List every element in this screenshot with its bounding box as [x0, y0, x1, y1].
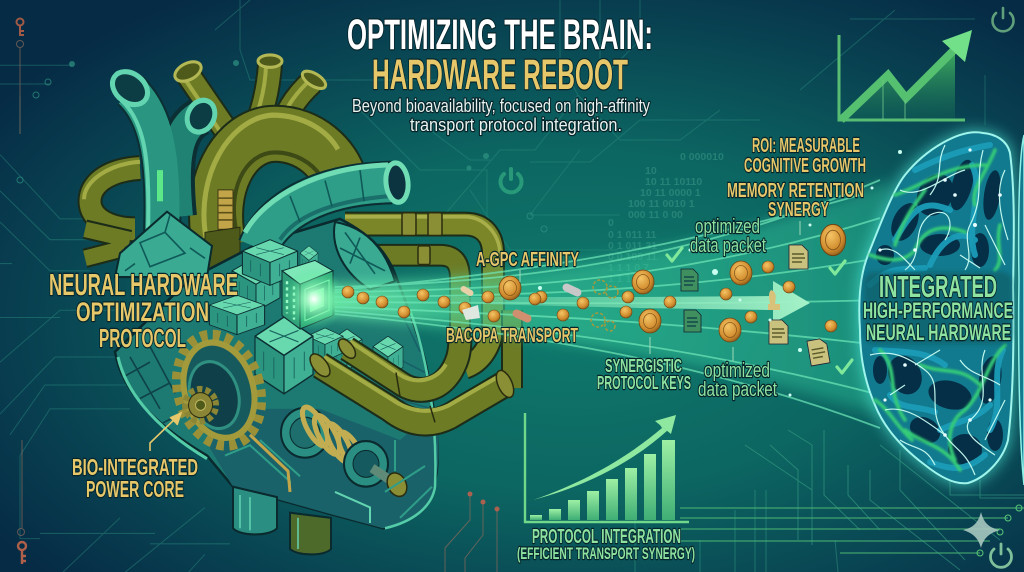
vessel opening [384, 162, 410, 203]
binary digits: 0 1 011 11 [608, 229, 657, 241]
green folds [870, 150, 1005, 470]
stream glow [325, 180, 890, 415]
label: optimized packet lower [698, 360, 777, 401]
label: roi: ROI: MEASURABLE [752, 135, 860, 157]
label: optimized packet lower: data packet [698, 379, 777, 401]
coins and particles [342, 224, 846, 342]
binary digits: 10 11 10110 [645, 176, 702, 188]
olive vessels top [172, 55, 328, 140]
label: integrated neural hardware [863, 269, 1013, 345]
label: neural hardware: PROTOCOL [99, 323, 186, 353]
label: bacopa transport: BACOPA TRANSPORT [446, 325, 578, 347]
dark fold pockets [873, 157, 1005, 466]
binary digits: 000 11 0 00 [628, 209, 683, 221]
circuit traces centre and top [215, 0, 985, 250]
icon: processor chip [282, 260, 333, 329]
subtitle: Beyond bioavailability, focused on high-affinity [352, 96, 650, 116]
icon: sparkle [963, 512, 1000, 548]
label: neural hardware [49, 267, 238, 353]
label: power core [72, 454, 198, 502]
circuit nodes [17, 60, 547, 232]
label: neural hardware: NEURAL HARDWARE [49, 267, 238, 302]
icon: key bottom left [18, 542, 26, 564]
icon: red nodes [468, 492, 500, 512]
binary digits: 100 11 0010 1 [628, 198, 695, 210]
lower body machinery [205, 409, 439, 528]
label: memory retention: SYNERGY [768, 199, 829, 221]
teal lobe left [115, 212, 212, 277]
brain glow [859, 132, 1014, 483]
central arrow [440, 281, 810, 323]
label: a-gpc affinity: A-GPC AFFINITY [476, 249, 579, 271]
leader lines [520, 221, 800, 361]
label: power core: BIO-INTEGRATED [72, 454, 198, 480]
back right olive pipes [345, 217, 512, 388]
front olive pipes [306, 336, 517, 423]
label: optimized packet upper [690, 216, 766, 257]
bars [530, 440, 675, 520]
brain text backing [864, 272, 1012, 344]
binary digits: 0 1 011 31 [608, 240, 657, 252]
chart caption [517, 526, 695, 563]
pipe collars [402, 213, 442, 265]
chart caption: (EFFICIENT TRANSPORT SYNERGY) [517, 544, 695, 563]
binary digits: 0 000010 [680, 151, 724, 163]
check marks [667, 248, 852, 373]
icon: power bottom right [990, 544, 1012, 567]
data stream flow [282, 150, 902, 428]
binary digits: 10 [645, 165, 657, 177]
title: HARDWARE REBOOT [372, 51, 628, 99]
olive aortic arch [204, 115, 340, 269]
label: optimized packet upper: data packet [690, 235, 766, 257]
icon: gear [166, 325, 272, 455]
label: neural hardware: OPTIMIZATION [76, 297, 209, 327]
circuit traces left [0, 65, 230, 572]
brain node dots [878, 148, 1002, 437]
pills and molecules [459, 280, 780, 331]
icon: spring piston [281, 403, 411, 500]
chart caption: PROTOCOL INTEGRATION [532, 526, 681, 548]
label: synergistic keys: PROTOCOL KEYS [597, 373, 691, 393]
documents [681, 245, 830, 366]
bright vein network [870, 145, 1008, 475]
blue folds [870, 145, 1003, 468]
second hemisphere sliver [1019, 135, 1024, 485]
label: roi [744, 135, 866, 177]
block stack [209, 240, 403, 394]
title [347, 11, 653, 99]
lower machinery details [225, 435, 432, 523]
binary digits: 10 11 0000 1 [640, 187, 701, 199]
top right growth chart [839, 30, 972, 120]
icon: key top left [16, 18, 24, 36]
teal lobe right [334, 222, 395, 290]
label: memory retention [727, 180, 864, 221]
arrow: power core pointer [150, 413, 181, 451]
sparkle dots [538, 150, 902, 396]
binary digits: 1 1 1 0 7 [608, 262, 649, 274]
left shell segments [118, 310, 435, 528]
brain illustration [859, 132, 1024, 485]
bottom bar chart [525, 413, 689, 522]
bottom vessels [233, 487, 331, 554]
icon: power faint middle [500, 169, 522, 192]
heart illustration [84, 55, 517, 554]
label: synergistic keys: SYNERGISTIC [605, 356, 682, 376]
brain hemisphere [859, 132, 1014, 483]
subtitle [352, 96, 650, 135]
axes [525, 413, 689, 522]
label: optimized packet lower: optimized [704, 360, 770, 382]
binary digits: 1 1 1 0 [608, 273, 640, 285]
vertical key traces [16, 40, 497, 572]
binary digits: 0 0 100 11 [608, 251, 657, 263]
panel: bottom right circuit lines [635, 430, 1024, 572]
label: power core: POWER CORE [86, 476, 184, 502]
icon: power top right [992, 8, 1014, 31]
subtitle: transport protocol integration. [410, 115, 622, 135]
label: synergistic keys [597, 356, 691, 393]
heart body [115, 219, 438, 528]
label: optimized packet upper: optimized [695, 216, 760, 238]
teal left vessels [106, 65, 220, 232]
label: roi: COGNITIVE GROWTH [744, 155, 866, 177]
binary digits: 0 [608, 217, 614, 229]
teal right arch vessel [245, 165, 392, 248]
binary digits [608, 151, 724, 285]
label: memory retention: MEMORY RETENTION [727, 180, 864, 202]
olive back loop pipes [84, 162, 140, 258]
stream lines [335, 180, 880, 428]
title: OPTIMIZING THE BRAIN: [347, 11, 653, 59]
growth arrow [533, 425, 670, 500]
central glow [282, 267, 346, 331]
